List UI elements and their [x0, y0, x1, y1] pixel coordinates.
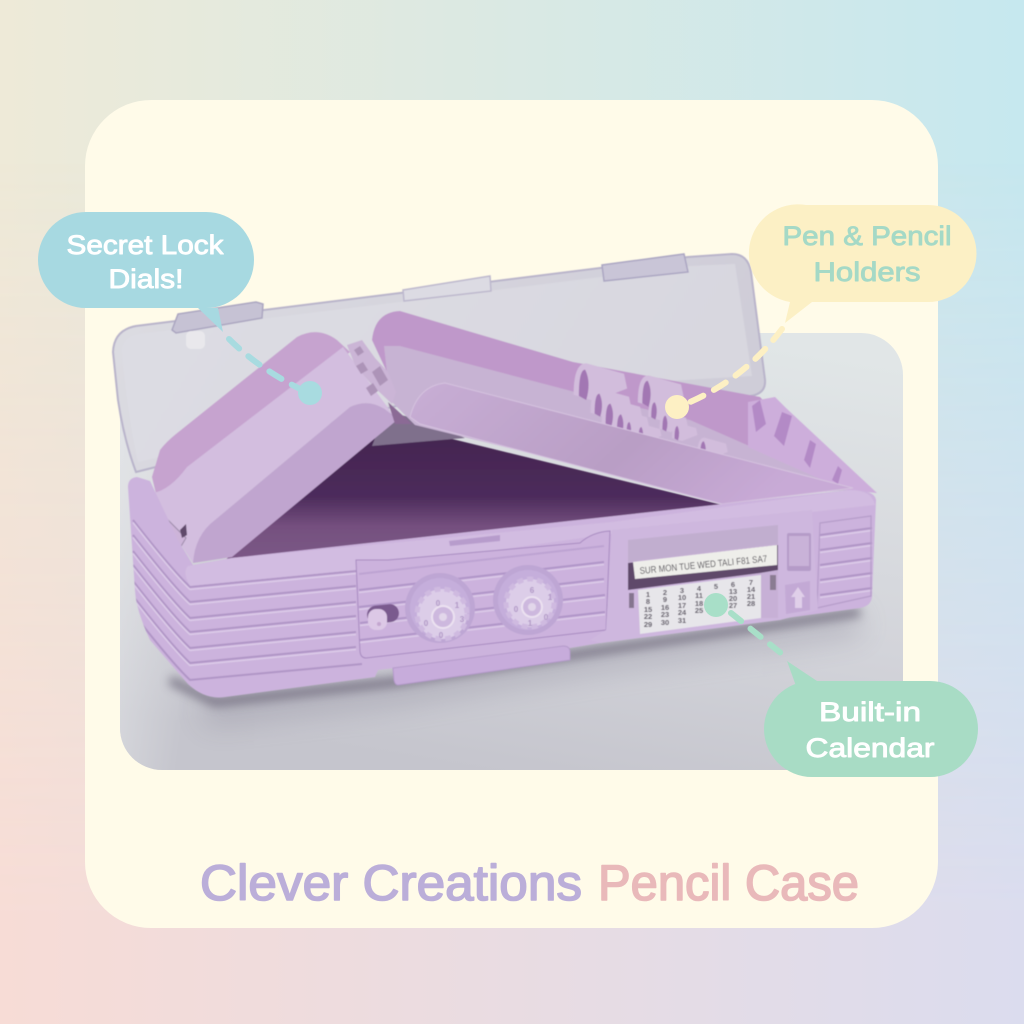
calendar grid: 10 [678, 593, 686, 602]
calendar grid: 16 [661, 603, 669, 612]
label: Secret Lock [66, 230, 224, 260]
top rim [185, 490, 875, 586]
title [200, 855, 859, 911]
calendar grid: 11 [695, 591, 703, 600]
side wheel and arrow button [785, 533, 811, 614]
combination dial left [405, 573, 475, 643]
calendar grid: 24 [678, 608, 687, 617]
calendar grid: 22 [644, 612, 652, 621]
weekday strip [633, 545, 777, 579]
bottom clip [393, 646, 570, 685]
combination dial left: 0 [439, 631, 444, 640]
label: Pen & Pencil [782, 221, 952, 251]
calendar grid: 31 [678, 616, 686, 625]
combination dial left: 3 [460, 615, 465, 624]
label [66, 230, 224, 294]
marker dot [665, 395, 689, 419]
callout: secret lock dials [38, 212, 322, 405]
marker dot [298, 381, 322, 405]
case body with ribs [128, 477, 876, 697]
right tray lid [410, 383, 853, 504]
right rim with ribs [748, 397, 877, 493]
calendar grid: 5 [714, 582, 718, 591]
calendar grid: 20 [729, 594, 737, 603]
calendar grid: 6 [731, 580, 735, 589]
pen holders [574, 363, 728, 459]
calendar grid: 27 [729, 601, 737, 610]
right rib panel outline [817, 516, 871, 608]
left tray flap [152, 332, 412, 563]
label: Dials! [108, 264, 184, 294]
label: Built-in [819, 697, 921, 727]
calendar grid: 30 [661, 618, 669, 627]
combination dial left: 0 [436, 599, 441, 608]
case interior [222, 430, 735, 564]
calendar grid: 1 [646, 590, 650, 599]
combination dial right [493, 565, 563, 635]
calendar grid: 4 [697, 584, 702, 593]
calendar grid: 7 [749, 578, 753, 587]
combination dial right: 6 [530, 586, 535, 595]
bubble [38, 212, 254, 332]
leader line [731, 613, 782, 654]
calendar grid: 25 [695, 606, 703, 615]
bubble [749, 204, 976, 323]
calendar grid: 23 [661, 610, 669, 619]
calendar grid: 21 [747, 592, 755, 601]
photo backdrop [120, 333, 903, 770]
calendar grid: 28 [747, 599, 755, 608]
label [806, 697, 934, 763]
transparent lid [113, 254, 765, 472]
combination dial right: 0 [514, 605, 519, 614]
calendar grid [638, 575, 761, 634]
hinge detail [347, 340, 396, 404]
calendar grid: 9 [663, 595, 667, 604]
label: Holders [814, 257, 920, 287]
calendar grid: 29 [644, 620, 652, 629]
title: Clever Creations [200, 855, 582, 911]
calendar housing [590, 510, 818, 643]
product: pencil case [113, 254, 877, 697]
combination dial left: 0 [424, 619, 429, 628]
callout: pen and pencil holders [665, 204, 976, 419]
leader line [229, 339, 302, 390]
calendar grid: 8 [646, 597, 650, 606]
calendar grid: 14 [747, 585, 756, 594]
label: Calendar [806, 733, 934, 763]
latch door with ribs [356, 531, 610, 658]
panel: cream card [85, 100, 938, 928]
label [782, 221, 952, 287]
combination dial right: 1 [528, 619, 533, 628]
combination dial right: 0 [544, 613, 549, 622]
combination dial right: 1 [548, 593, 553, 602]
inner tray flap with holders [372, 311, 877, 500]
combination dial left: 1 [455, 601, 460, 610]
marker dot [704, 593, 728, 617]
slider switch [366, 603, 400, 630]
calendar grid: 17 [678, 601, 686, 610]
calendar grid: 2 [663, 588, 667, 597]
calendar grid: 15 [644, 605, 652, 614]
callout: built-in calendar [704, 593, 978, 777]
calendar grid: 18 [695, 599, 703, 608]
weekday strip: SUR MON TUE WED TALI F81 SA7 [639, 554, 768, 577]
leader line [690, 329, 782, 402]
title: Pencil Case [598, 855, 859, 911]
calendar grid: 13 [729, 587, 737, 596]
calendar grid: 3 [680, 586, 684, 595]
bubble [764, 661, 978, 777]
